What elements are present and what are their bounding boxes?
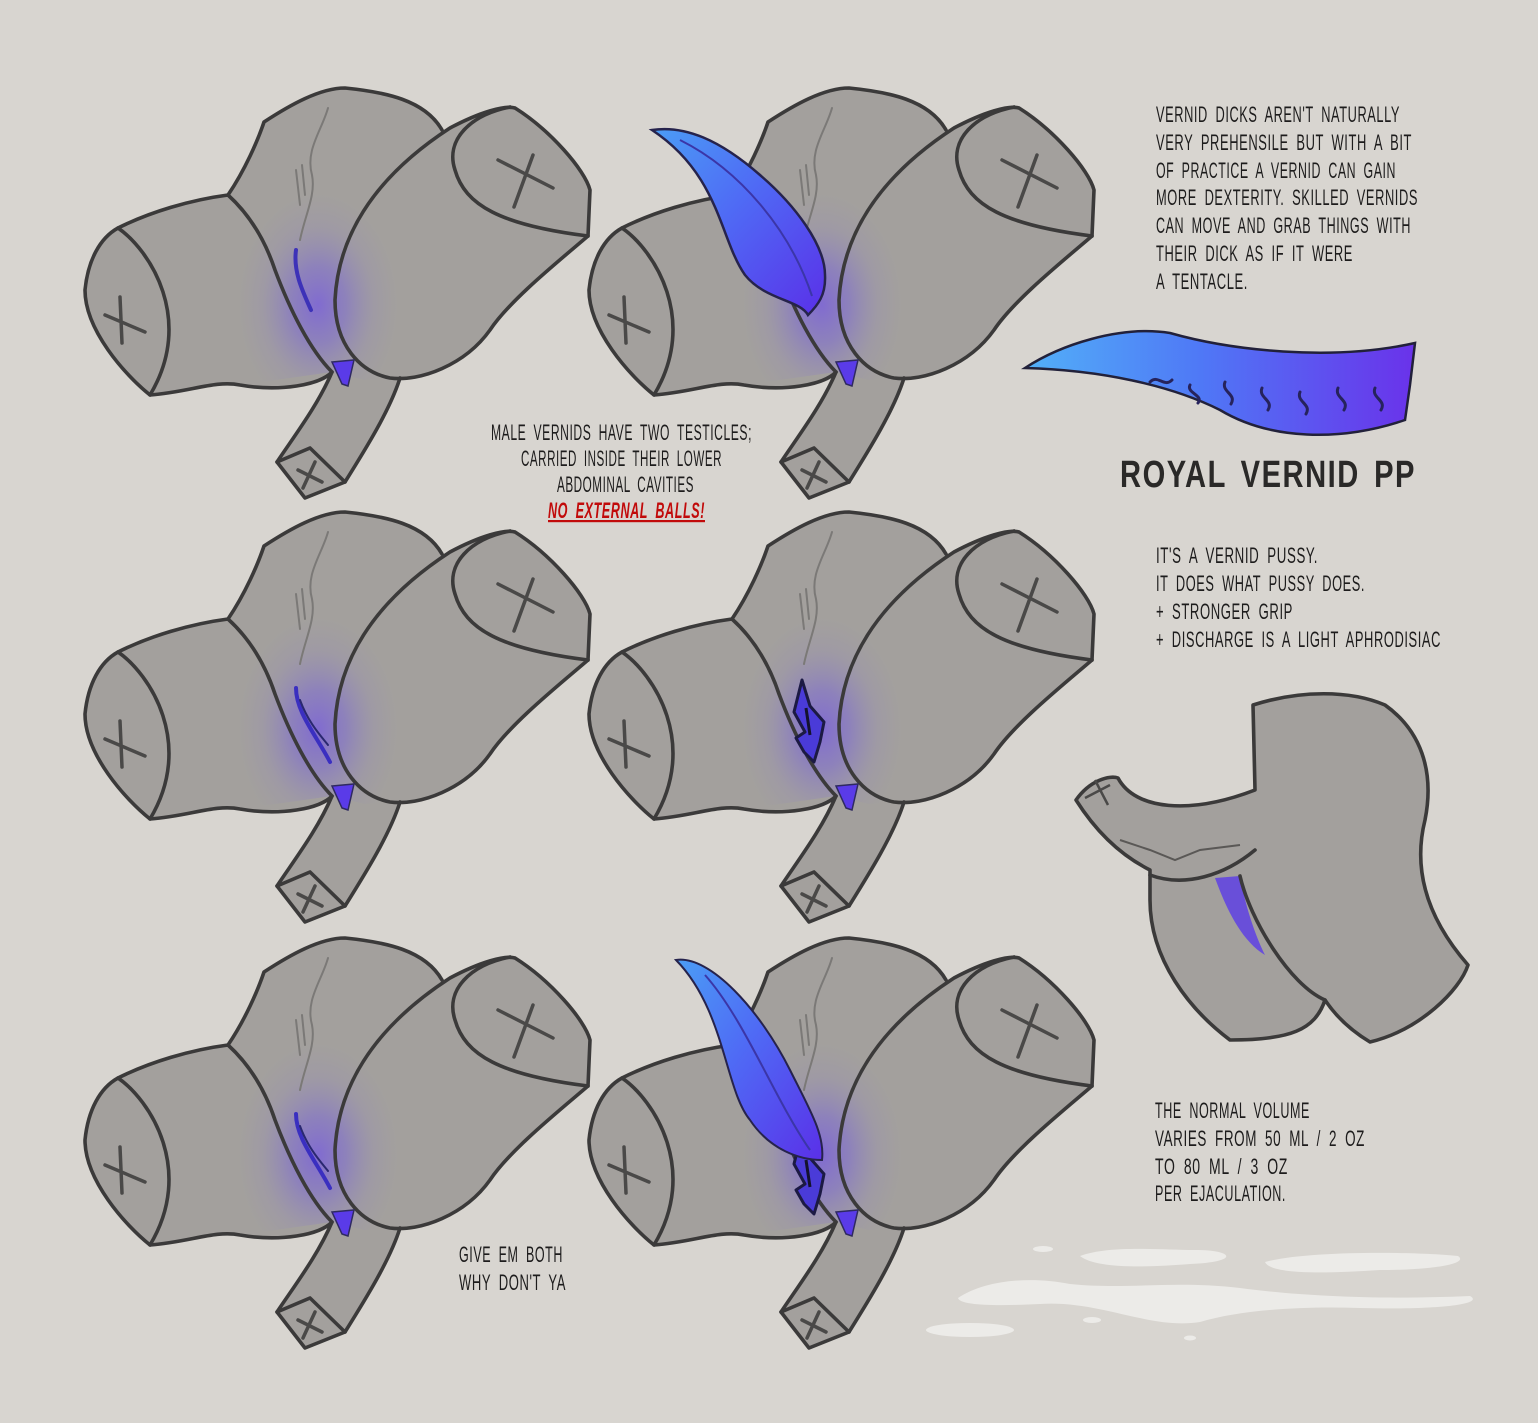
figure: closed variant, middle left (85, 512, 590, 922)
text: testicles note: CARRIED INSIDE THEIR LOWER (521, 446, 722, 471)
text: both note (459, 1242, 566, 1295)
royal tentacle illustration (1025, 331, 1415, 435)
text: volume note (1155, 1098, 1365, 1206)
text: dexterity note (1156, 102, 1418, 294)
text: volume note: TO 80 ML / 3 OZ (1155, 1154, 1288, 1179)
text: volume note: VARIES FROM 50 ML / 2 OZ (1155, 1126, 1365, 1151)
text: female note (1156, 543, 1441, 652)
figure: closed variant, bottom left (85, 938, 590, 1348)
text: volume note: THE NORMAL VOLUME (1155, 1098, 1310, 1123)
text: both note: GIVE EM BOTH (459, 1242, 563, 1267)
text: testicles note: ABDOMINAL CAVITIES (557, 472, 694, 497)
text: female note: + STRONGER GRIP (1156, 599, 1293, 624)
text: female note: IT DOES WHAT PUSSY DOES. (1156, 571, 1365, 596)
figure: male with tentacle, top middle (589, 88, 1094, 498)
text: testicles note: NO EXTERNAL BALLS! (548, 498, 705, 523)
text: volume note: PER EJACULATION. (1155, 1181, 1286, 1206)
figure: female, middle (589, 512, 1094, 922)
title: royal vernid: ROYAL VERNID PP (1120, 454, 1416, 496)
illustration: puddle (926, 1246, 1473, 1340)
text: female note: IT'S A VERNID PUSSY. (1156, 543, 1318, 568)
text: both note: WHY DON'T YA (459, 1270, 566, 1295)
text: dexterity note: THEIR DICK AS IF IT WERE (1156, 241, 1353, 266)
text: testicles note: MALE VERNIDS HAVE TWO TESTICLES; (491, 420, 752, 445)
text: testicles note (491, 420, 752, 523)
text: dexterity note: A TENTACLE. (1156, 269, 1248, 294)
figure: both organs, bottom middle (589, 938, 1094, 1348)
figure: male closed, top left (85, 88, 590, 498)
figure: rear view, right (1076, 694, 1468, 1042)
